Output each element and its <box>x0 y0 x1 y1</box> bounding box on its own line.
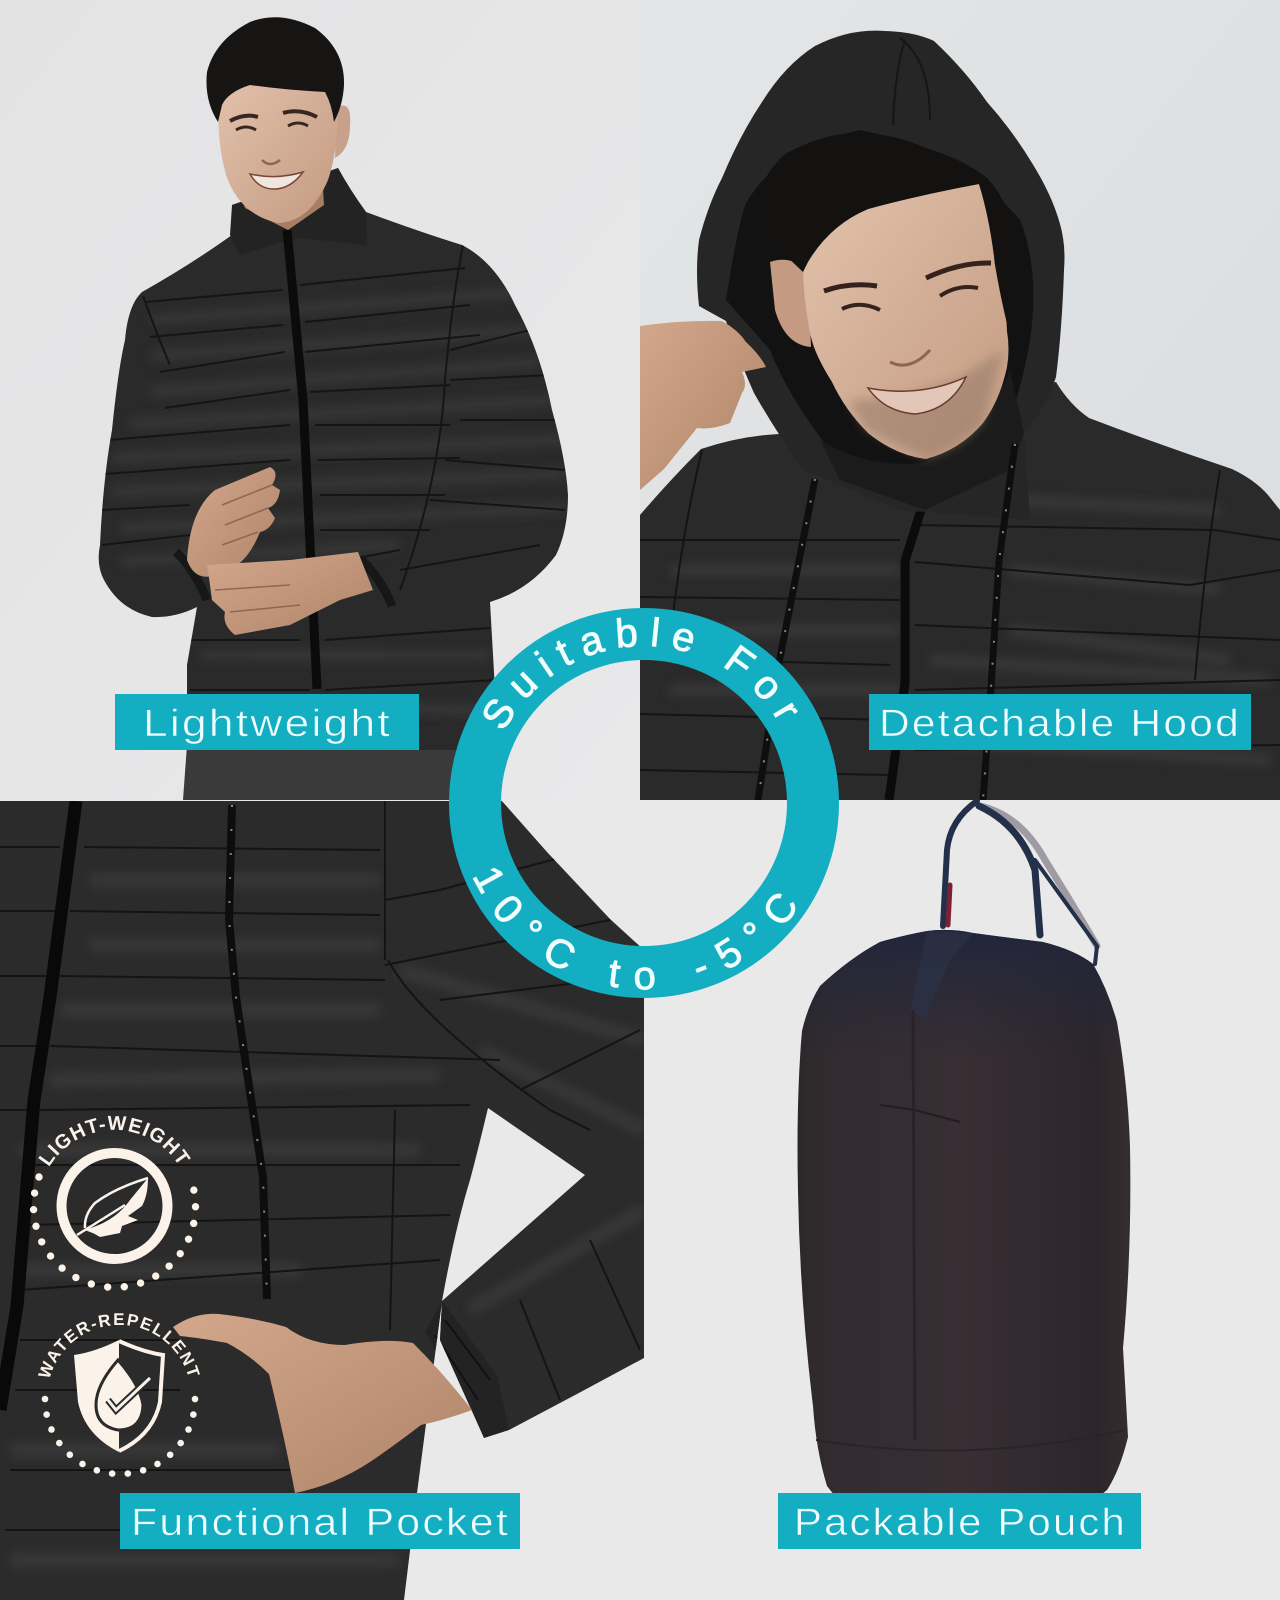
cuffs <box>176 552 392 606</box>
high collar <box>820 370 1024 510</box>
zipper <box>287 230 317 689</box>
ring text: temperature range: 10°C to -5°C <box>472 868 796 990</box>
hand in pocket <box>173 1314 472 1493</box>
badge: light-weight <box>30 1116 200 1291</box>
jacket <box>99 168 568 750</box>
badge dots: light-weight <box>33 1177 196 1287</box>
head <box>206 17 350 230</box>
label: lightweight: Lightweight <box>143 703 392 745</box>
hair <box>758 133 1012 328</box>
panel: lightweight photo <box>98 17 568 800</box>
label: functional pocket <box>120 1493 520 1549</box>
label: packable pouch: Packable Pouch <box>794 1502 1127 1544</box>
hands <box>187 467 373 635</box>
badge text: light-weight: LIGHT-WEIGHT <box>38 1116 191 1166</box>
badge: water-repellent <box>38 1313 200 1477</box>
jacket <box>0 800 644 1600</box>
collar <box>230 168 367 255</box>
panel: functional pocket photo <box>0 800 644 1600</box>
drawstrings <box>758 444 1015 800</box>
label: lightweight <box>115 694 419 750</box>
hair <box>206 17 344 122</box>
trousers <box>183 745 484 800</box>
zipper <box>889 510 921 800</box>
icon: ring <box>62 1153 168 1259</box>
hand <box>640 321 766 490</box>
panel: detachable hood photo <box>640 0 1280 800</box>
temperature ring badge <box>449 608 839 998</box>
cuff <box>425 1301 509 1438</box>
zipper <box>0 801 76 1410</box>
label: detachable hood <box>869 694 1251 750</box>
head <box>758 133 1012 459</box>
label: detachable hood: Detachable Hood <box>879 703 1241 745</box>
ring text: suitable for: Suitable For <box>484 616 798 728</box>
label: packable pouch <box>778 1493 1141 1549</box>
panel: packable pouch photo <box>644 801 1280 1600</box>
hood <box>697 31 1064 520</box>
pouch body <box>798 930 1130 1500</box>
label: functional pocket: Functional Pocket <box>131 1502 510 1544</box>
icon: shield <box>74 1340 163 1452</box>
stubble <box>848 350 1003 459</box>
badge dots: water-repellent <box>45 1399 195 1474</box>
badge text: water-repellent: WATER-REPELLENT <box>38 1313 200 1377</box>
drawstring <box>229 805 267 1299</box>
pouch handles <box>943 801 1097 964</box>
facial features <box>230 111 317 164</box>
jacket <box>640 382 1280 800</box>
facial features <box>824 263 991 365</box>
icon: feather <box>77 1178 148 1237</box>
